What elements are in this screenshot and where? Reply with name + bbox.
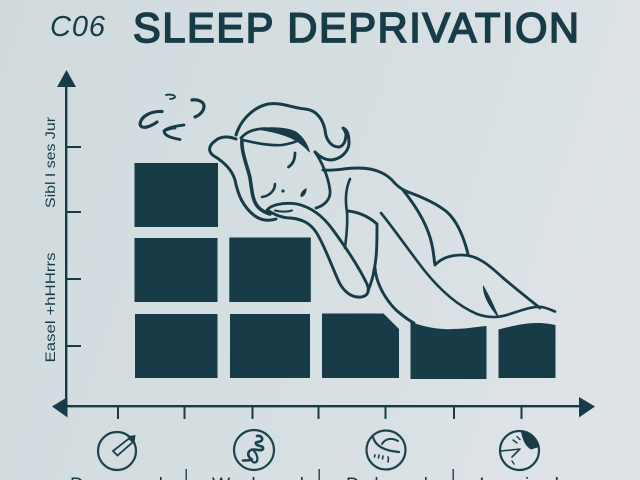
neck and back	[323, 168, 468, 254]
pillow and shoulder outline	[210, 137, 276, 220]
y axis with arrow	[57, 70, 76, 407]
mouth mark	[300, 188, 307, 197]
nose dot	[281, 189, 285, 193]
column 1 blocks	[134, 163, 218, 378]
column 5 block	[498, 323, 556, 378]
illustration: sleeping woman	[210, 104, 555, 323]
icon: curved lines in circle	[366, 430, 406, 470]
eyebrow	[288, 153, 295, 167]
column 4 block	[410, 322, 486, 379]
sleeve	[348, 211, 377, 291]
icon: pencil in circle	[98, 432, 136, 470]
icon: sleep scribbles	[140, 95, 204, 140]
column 2 blocks	[229, 238, 311, 378]
stepped bar chart	[134, 163, 556, 379]
icon: gauge in circle	[500, 431, 539, 470]
hair outline	[236, 104, 349, 160]
hand and forearm	[267, 203, 368, 297]
closed eye	[262, 184, 275, 197]
chapter code: C06	[50, 11, 106, 43]
chart axes	[52, 70, 595, 419]
hip and bar outline	[375, 268, 414, 323]
cheek line	[315, 152, 330, 208]
column 3 block	[322, 314, 399, 378]
raised knee	[403, 190, 435, 265]
chest line	[345, 179, 350, 248]
bottom category labels	[70, 475, 559, 480]
arm to leg line	[381, 213, 555, 317]
fingers	[275, 210, 292, 212]
face left edge	[242, 140, 270, 214]
y axis label: lower: Easel +hHHrrs	[42, 252, 58, 362]
foot mark	[483, 285, 498, 316]
bottom label dividers	[186, 469, 454, 480]
hair fringe	[241, 128, 310, 152]
title: SLEEP DEPRIVATION	[133, 4, 579, 51]
icon: squiggle in circle	[234, 430, 274, 470]
y axis label: upper: Sibl I ses Jur	[42, 117, 58, 208]
x axis with arrows	[52, 397, 595, 418]
axis tick marks	[66, 146, 522, 419]
